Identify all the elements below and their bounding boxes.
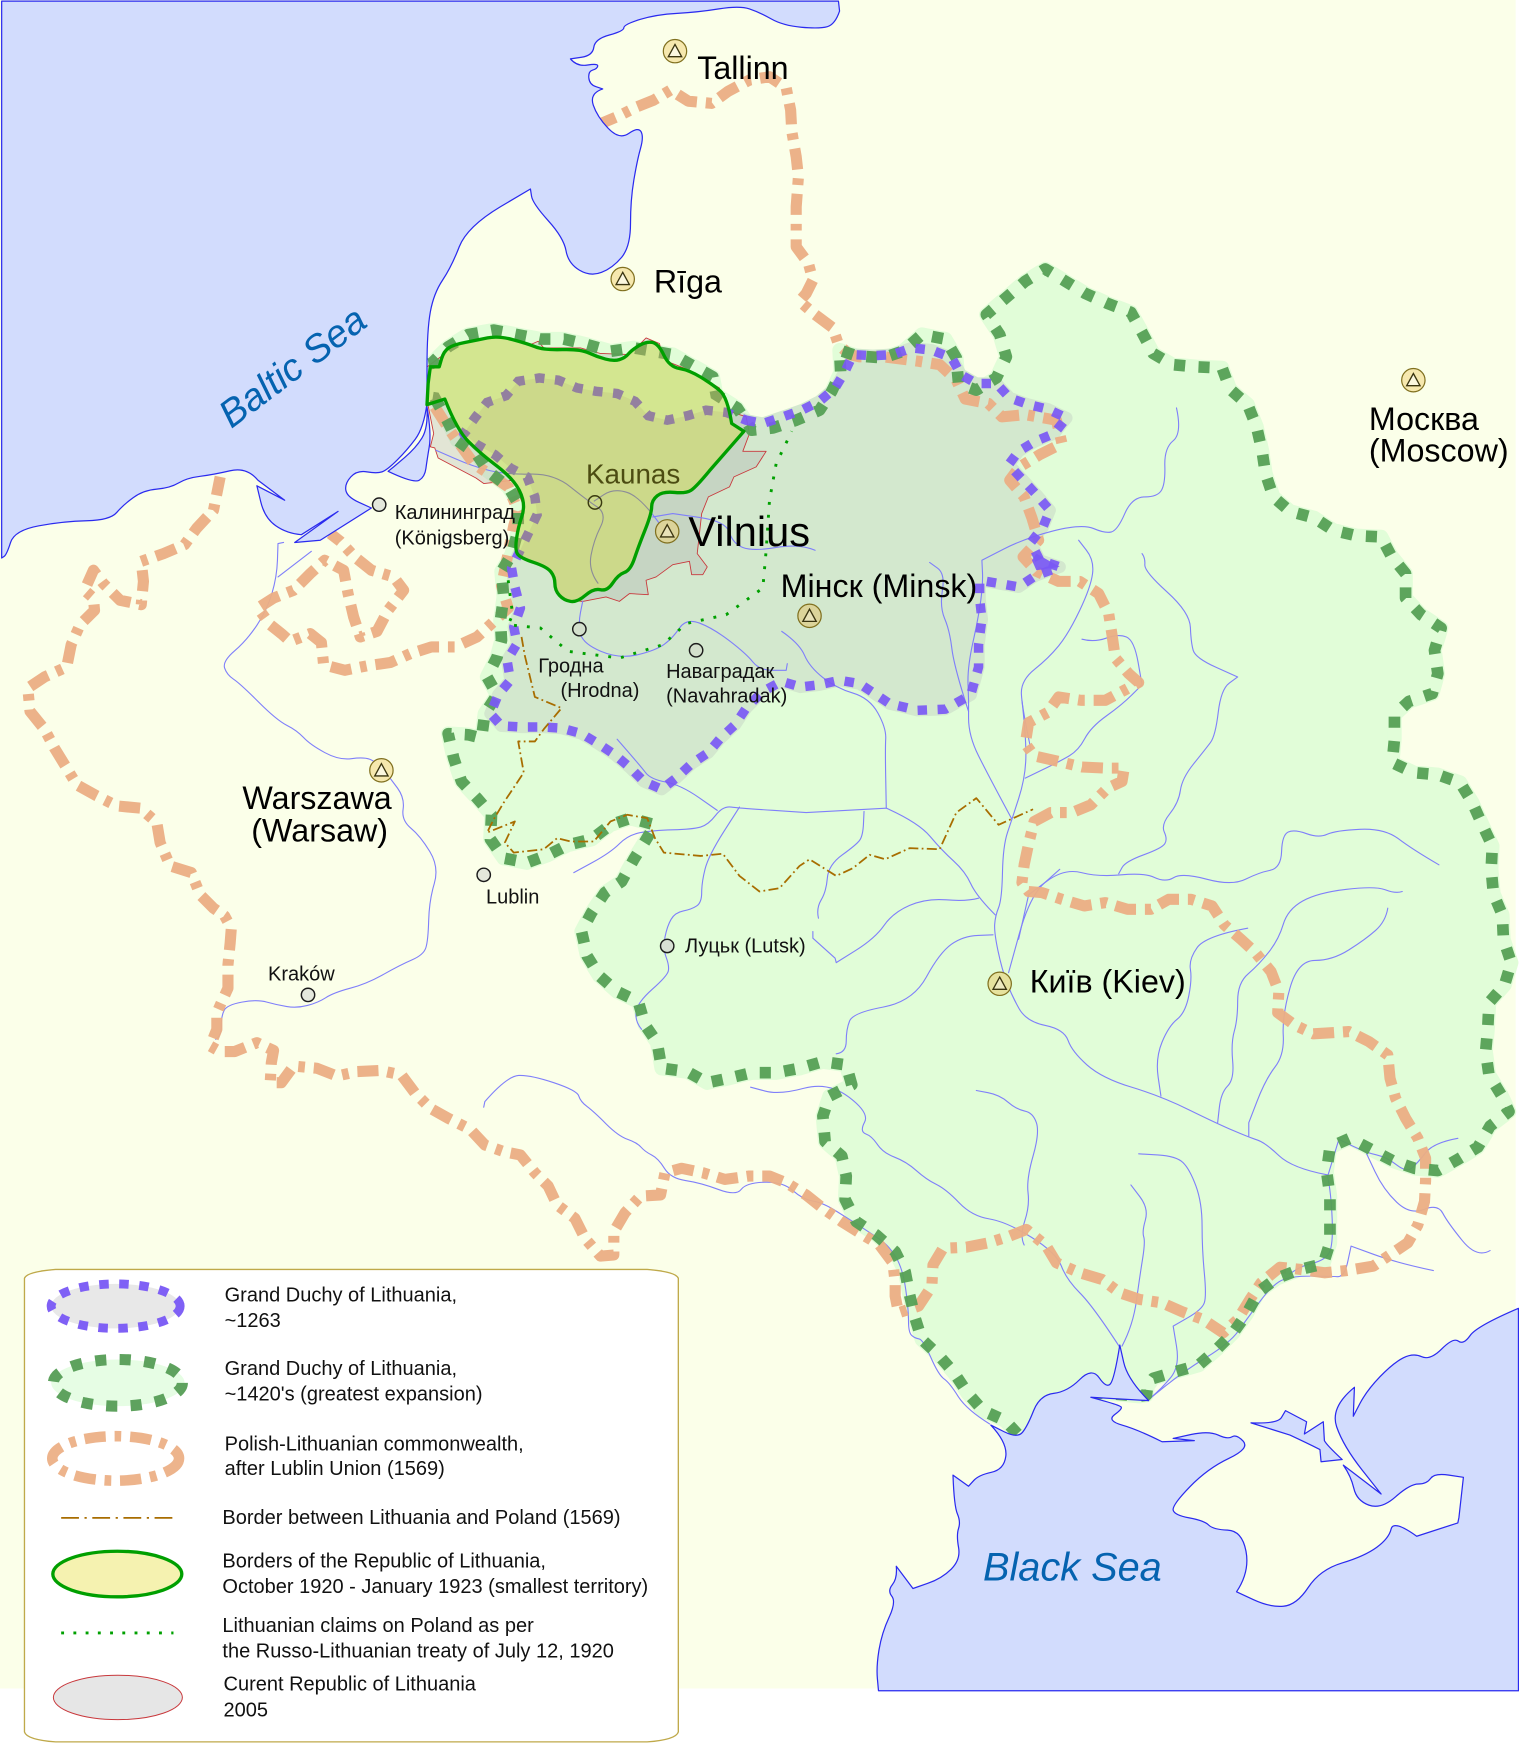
legend: current Republic of Lithuania: Curent Republic of Lithuania bbox=[224, 1674, 477, 1696]
border: Grand Duchy of Lithuania ~1420s bbox=[414, 269, 1511, 1435]
legend: Grand Duchy ~1420s: ~1420's (greatest expansion) bbox=[225, 1384, 483, 1406]
region: Grand Duchy of Lithuania ~1263 bbox=[464, 348, 1066, 789]
city: Warsaw: (Warsaw) bbox=[251, 812, 388, 848]
legend: borders of the Republic 1920-1923: October 1920 - January 1923 (smallest territory) bbox=[222, 1576, 648, 1598]
city: Moscow: Москва bbox=[1369, 401, 1479, 437]
legend: Grand Duchy ~1263: Grand Duchy of Lithuania, bbox=[225, 1285, 457, 1307]
city: Lublin bbox=[477, 868, 539, 909]
legend: borders of the Republic 1920-1923: Borders of the Republic of Lithuania, bbox=[222, 1550, 546, 1572]
city: Navahradak: Наваградак bbox=[666, 661, 775, 683]
legend: Grand Duchy ~1263: ~1263 bbox=[225, 1310, 281, 1332]
rivers bbox=[216, 408, 1490, 1424]
city: Kaunas bbox=[586, 459, 680, 509]
city: Riga bbox=[611, 263, 722, 299]
city: Krakow bbox=[268, 963, 335, 1002]
city: Krakow: Kraków bbox=[268, 963, 335, 985]
city: Hrodna: Гродна bbox=[538, 656, 604, 678]
legend: Lithuanian claims: Lithuanian claims on Poland as per bbox=[222, 1615, 534, 1637]
city: Tallinn: Tallinn bbox=[697, 50, 789, 86]
label: Baltic Sea: Baltic Sea bbox=[211, 298, 375, 436]
city: Minsk bbox=[781, 568, 977, 628]
region: Republic of Lithuania 1920-1923 bbox=[425, 336, 746, 604]
current Republic of Lithuania 2005 bbox=[427, 338, 766, 601]
Curonian Lagoon bbox=[388, 407, 430, 481]
legend: Grand Duchy ~1420s: Grand Duchy of Lithuania, bbox=[225, 1358, 457, 1380]
Baltic Sea bbox=[2, 1, 840, 558]
legend: borders of the Republic 1920-1923 bbox=[53, 1550, 648, 1598]
city: Kaliningrad: Калининград bbox=[395, 502, 515, 524]
border: Grand Duchy of Lithuania ~1263 bbox=[464, 348, 1066, 789]
legend: Polish-Lithuanian commonwealth: after Lublin Union (1569) bbox=[225, 1458, 445, 1480]
legend: Polish-Lithuanian commonwealth bbox=[52, 1434, 524, 1481]
city: Minsk: Мінск (Minsk) bbox=[781, 568, 977, 604]
city: Lublin: Lublin bbox=[486, 887, 539, 909]
Black Sea bbox=[877, 1308, 1518, 1691]
legend: border 1569: Border between Lithuania and Poland (1569) bbox=[222, 1507, 621, 1529]
label: Black Sea: Black Sea bbox=[983, 1546, 1162, 1590]
city: Hrodna: (Hrodna) bbox=[560, 680, 639, 702]
city: Moscow bbox=[1369, 368, 1509, 468]
Sivash lagoon bbox=[1251, 1411, 1342, 1462]
city: Warsaw: Warszawa bbox=[242, 780, 392, 816]
city: Kaliningrad bbox=[373, 498, 515, 550]
legend panel bbox=[24, 1269, 678, 1742]
city: Vilnius: Vilnius bbox=[688, 508, 810, 555]
legend: Polish-Lithuanian commonwealth: Polish-Lithuanian commonwealth, bbox=[225, 1434, 524, 1456]
city: Navahradak bbox=[666, 644, 787, 708]
legend: Grand Duchy ~1420s bbox=[51, 1358, 483, 1406]
city: Kaliningrad: (Königsberg) bbox=[395, 528, 509, 550]
city: Lutsk: Луцьк (Lutsk) bbox=[685, 936, 806, 958]
legend: Grand Duchy ~1263 bbox=[51, 1284, 457, 1332]
city: Riga: Rīga bbox=[654, 263, 722, 299]
region: Grand Duchy of Lithuania ~1420s bbox=[414, 269, 1511, 1435]
city: Moscow: (Moscow) bbox=[1369, 432, 1509, 468]
border: Polish-Lithuanian commonwealth after Lublin Union 1569 bbox=[28, 77, 1426, 1333]
legend: current Republic of Lithuania bbox=[53, 1674, 477, 1721]
city: Warsaw bbox=[242, 759, 393, 848]
city: Kaunas: Kaunas bbox=[586, 459, 680, 490]
border between Lithuania and Poland 1569 bbox=[487, 637, 1033, 892]
Lithuanian claims line 1920 bbox=[508, 431, 792, 658]
city: Navahradak: (Navahradak) bbox=[666, 686, 787, 708]
legend: current Republic of Lithuania: 2005 bbox=[224, 1699, 268, 1721]
city: Hrodna bbox=[538, 622, 639, 702]
city: Kiev: Київ (Kiev) bbox=[1030, 964, 1186, 1000]
legend: Lithuanian claims: the Russo-Lithuanian treaty of July 12, 1920 bbox=[222, 1640, 614, 1662]
legend: Lithuanian claims bbox=[61, 1615, 614, 1662]
city: Tallinn bbox=[663, 39, 789, 86]
